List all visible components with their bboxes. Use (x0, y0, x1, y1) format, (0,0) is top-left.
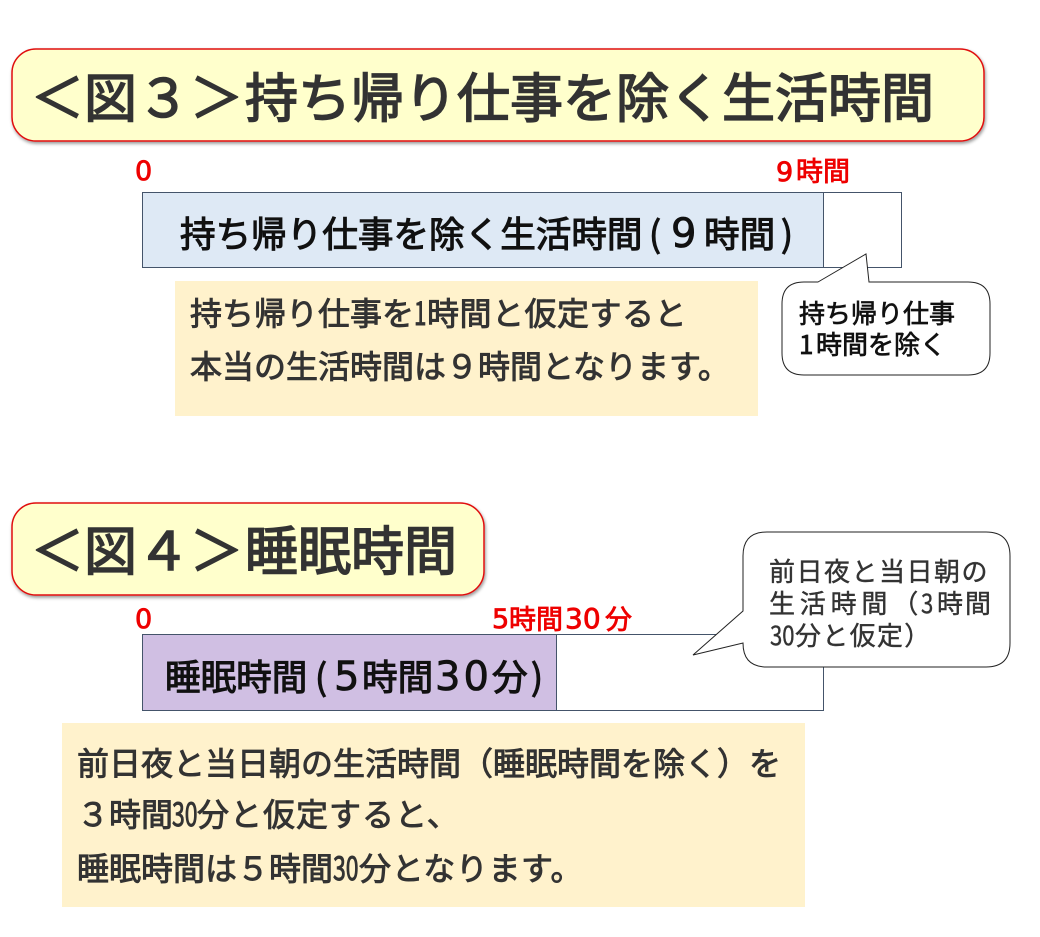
bar: sleep time with remainder: 時間 (362, 650, 433, 701)
callout: morning and evening living time (693, 532, 1010, 667)
bar: sleep time with remainder: 分 (492, 650, 528, 701)
axis label: 5 hours 30 minutes: 時間 (509, 598, 563, 637)
text block: figure 3 explanation: 1 (414, 288, 426, 334)
callout: excludes one hour of work: 1 (799, 325, 813, 362)
bar: total with remainder (142, 192, 902, 268)
axis label: 5 hours 30 minutes (492, 598, 632, 637)
bar: sleep time with remainder: 5 (334, 654, 359, 700)
text block: figure 4 explanation: 睡眠時間は５時間 (77, 844, 333, 890)
text block: figure 3 explanation (175, 281, 758, 416)
bar: sleep time with remainder: 睡眠時間 (165, 650, 307, 701)
bar: sleep time with remainder: ( (315, 650, 327, 701)
bar: sleep time with remainder (142, 634, 824, 710)
callout: morning and evening living time: 3 (921, 583, 933, 621)
bar: total with remainder: ) (781, 207, 793, 258)
axis label: 5 hours 30 minutes: 5 (492, 604, 509, 635)
bar: total with remainder: 持ち帰り仕事を除く生活時間 (180, 207, 643, 258)
callout: excludes one hour of work (782, 254, 990, 375)
callout: excludes one hour of work: 時間を除く (816, 325, 946, 362)
bar: sleep time with remainder: 30 (435, 654, 492, 700)
panel: figure 3 (12, 49, 990, 416)
axis label: 0: 0 (135, 604, 152, 635)
bar: sleep time with remainder: ) (531, 650, 543, 701)
text block: figure 4 explanation: 30 (333, 844, 359, 890)
axis label: 9 hours: 時間 (796, 150, 850, 189)
callout: morning and evening living time: 時間 (937, 584, 993, 621)
callout: excludes one hour of work: 持ち帰り仕事 (799, 294, 955, 331)
axis label: 5 hours 30 minutes: 30 (565, 602, 601, 635)
heading: figure 4 title: 睡眠時間 (245, 510, 457, 586)
callout: morning and evening living time: 前日夜と当日朝の (769, 552, 989, 589)
text block: figure 4 explanation: 前日夜と当日朝の生活時間（睡眠時間を除く）を (77, 739, 781, 785)
text block: figure 3 explanation: 本当の生活時間は９時間となります。 (190, 342, 730, 388)
heading: figure 3 title: 持ち帰り仕事を除く生活時間 (245, 57, 934, 133)
text block: figure 4 explanation: 30 (172, 790, 198, 836)
axis label: 5 hours 30 minutes: 分 (605, 598, 632, 637)
text block: figure 3 explanation: 時間と仮定すると (427, 289, 687, 335)
text block: figure 4 explanation: 分と仮定すると、 (197, 790, 460, 836)
axis label: 0: 0 (135, 156, 152, 187)
panel: figure 4 (12, 503, 1010, 907)
text block: figure 4 explanation: 分となります。 (359, 844, 583, 890)
bar: total with remainder: 9 (671, 211, 696, 257)
heading: figure 4 title (12, 503, 484, 595)
text block: figure 4 explanation: ３時間 (77, 790, 173, 836)
heading: figure 3 title: ＜図３＞ (31, 57, 243, 133)
text block: figure 4 explanation (62, 723, 805, 907)
axis label: 9 hours: 9 (776, 157, 793, 188)
callout: morning and evening living time: 30 (770, 615, 795, 653)
callout: morning and evening living time: 生活時間（ (769, 584, 923, 621)
bar: total with remainder: ( (649, 207, 661, 258)
heading: figure 4 title: ＜図４＞ (31, 510, 243, 586)
text block: figure 3 explanation: 持ち帰り仕事を (190, 289, 414, 335)
callout: morning and evening living time: 分と仮定） (795, 616, 932, 653)
heading: figure 3 title (12, 49, 984, 141)
bar: total with remainder: 時間 (704, 207, 775, 258)
